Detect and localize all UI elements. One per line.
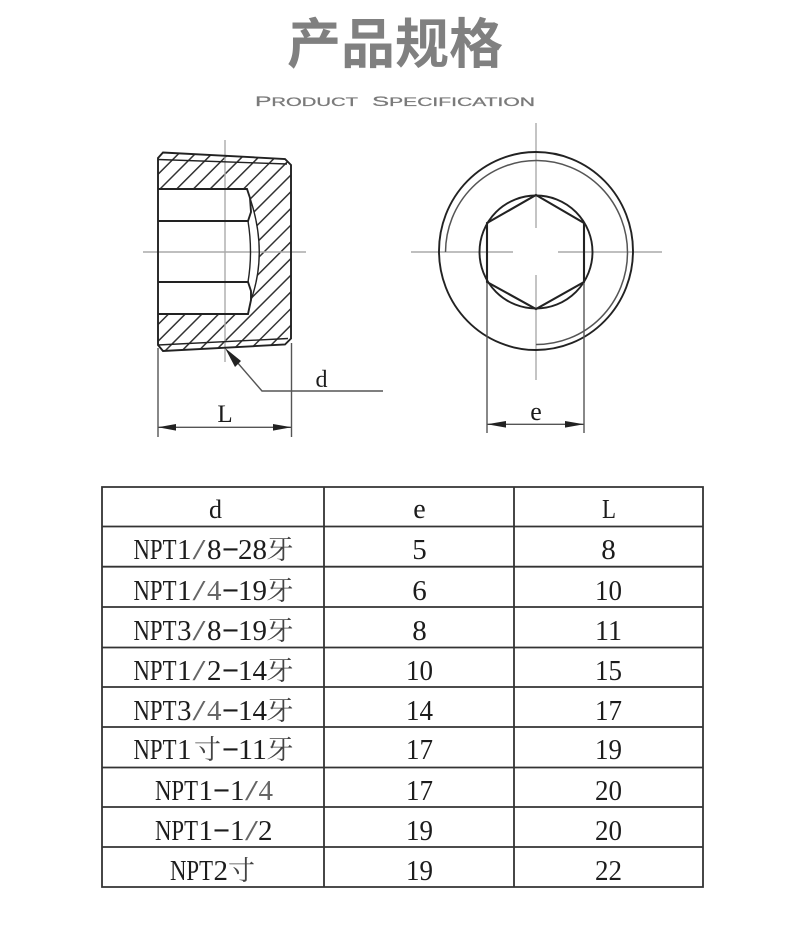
- row 3: 19: [238, 615, 267, 647]
- dimension e: e: [530, 397, 542, 426]
- row 3: -: [222, 612, 240, 644]
- row 6: 寸: [194, 728, 221, 767]
- row 2: 19: [238, 575, 267, 607]
- hatching: [158, 154, 290, 350]
- row 4: /: [192, 655, 207, 687]
- row 3: 8: [207, 615, 222, 647]
- row 6: -: [222, 731, 240, 763]
- end view drawing: [411, 123, 662, 433]
- row 7: NPT: [155, 775, 198, 807]
- dimension L: L: [217, 401, 233, 428]
- row 9: 寸: [228, 849, 255, 888]
- row 4: 1: [177, 655, 192, 687]
- dimension L: [158, 343, 292, 437]
- row 7: 1: [198, 775, 213, 807]
- row 4: 14: [238, 655, 268, 687]
- row 2: 6: [412, 575, 427, 607]
- outer circle: [439, 152, 633, 350]
- header row: L: [602, 494, 616, 524]
- body outline: [158, 152, 291, 351]
- subtitle: P RODUCT: [255, 93, 358, 109]
- hexagon socket: [487, 195, 584, 309]
- row 2: 牙: [266, 569, 294, 608]
- row 5: 14: [238, 695, 268, 727]
- row 6: 牙: [266, 728, 294, 767]
- row 3: 3: [177, 615, 192, 647]
- row 1: 5: [412, 534, 427, 566]
- row 5: NPT: [134, 695, 177, 727]
- row 8: -: [212, 812, 230, 844]
- row 1: 8: [207, 534, 222, 566]
- row 9: [170, 849, 622, 888]
- bore end arcs: [248, 198, 259, 300]
- row 2: 10: [595, 575, 622, 607]
- row 5: 17: [595, 695, 622, 727]
- leader for d: [225, 348, 383, 391]
- thread arc: [446, 161, 627, 345]
- row 2: 1: [177, 575, 192, 607]
- threaded bore: [158, 189, 251, 314]
- row 5: 3: [177, 695, 192, 727]
- centre lines of end view: [411, 123, 662, 380]
- row 6: 11: [238, 734, 267, 766]
- row 5: 14: [406, 695, 433, 727]
- row 4: [134, 649, 622, 688]
- row 1: 28: [238, 534, 267, 566]
- subtitle: S PECIFICATION: [372, 93, 535, 109]
- row 5: 4: [207, 695, 222, 727]
- header row: [209, 494, 616, 525]
- header row: d: [209, 495, 222, 524]
- row 7: 1: [230, 775, 244, 807]
- row 6: 1: [177, 734, 192, 766]
- title: 产品规格: [287, 0, 503, 79]
- section view drawing: [143, 140, 383, 437]
- row 3: 11: [595, 615, 622, 647]
- row 4: -: [222, 652, 240, 684]
- row 8: 20: [595, 815, 622, 847]
- row 6: 17: [406, 734, 433, 766]
- row 9: NPT: [170, 855, 213, 887]
- row 1: /: [192, 534, 207, 566]
- header row: e: [413, 494, 426, 525]
- row 3: 牙: [266, 609, 294, 648]
- row 7: [155, 772, 622, 807]
- row 2: /: [192, 575, 207, 607]
- row 7: 17: [406, 775, 433, 807]
- row 8: 1: [198, 815, 213, 847]
- row 2: 4: [207, 575, 222, 607]
- dimension e: [487, 283, 584, 433]
- row 7: /: [245, 775, 260, 807]
- row 4: 牙: [266, 649, 294, 688]
- table grid: [102, 487, 703, 887]
- row 9: 19: [406, 855, 433, 887]
- row 4: NPT: [134, 655, 177, 687]
- row 7: 4: [258, 775, 274, 807]
- row 1: 牙: [266, 528, 294, 567]
- socket circle: [480, 196, 592, 308]
- subtitle: [255, 93, 535, 109]
- row 2: NPT: [134, 575, 177, 607]
- row 1: 1: [177, 534, 192, 566]
- row 4: 10: [406, 655, 433, 687]
- row 2: [134, 569, 622, 608]
- row 5: -: [222, 692, 240, 724]
- row 6: NPT: [134, 734, 177, 766]
- row 7: 20: [595, 775, 622, 807]
- row 5: [134, 689, 622, 728]
- row 8: /: [245, 815, 260, 847]
- row 3: 8: [412, 615, 427, 647]
- row 8: 19: [406, 815, 433, 847]
- row 5: 牙: [266, 689, 294, 728]
- centre lines of section view: [143, 140, 306, 362]
- row 8: 1: [230, 815, 244, 847]
- row 3: [134, 609, 622, 648]
- row 7: -: [212, 772, 230, 804]
- row 4: 15: [595, 655, 622, 687]
- row 2: -: [222, 572, 240, 604]
- thread lines: [158, 160, 288, 345]
- row 8: NPT: [155, 815, 198, 847]
- row 1: -: [222, 531, 240, 563]
- row 8: 2: [258, 815, 272, 847]
- label d: d: [316, 367, 328, 393]
- row 3: /: [192, 615, 207, 647]
- row 3: NPT: [134, 615, 177, 647]
- row 1: 8: [601, 534, 616, 566]
- row 1: [134, 528, 616, 567]
- row 9: 2: [214, 855, 228, 887]
- row 9: 22: [595, 855, 622, 887]
- row 5: /: [192, 695, 207, 727]
- row 1: NPT: [134, 534, 177, 566]
- row 6: [134, 728, 622, 767]
- row 8: [155, 812, 622, 847]
- row 4: 2: [207, 655, 222, 687]
- specification table: [102, 487, 703, 888]
- row 6: 19: [595, 734, 622, 766]
- infographic canvas: [101, 16, 704, 888]
